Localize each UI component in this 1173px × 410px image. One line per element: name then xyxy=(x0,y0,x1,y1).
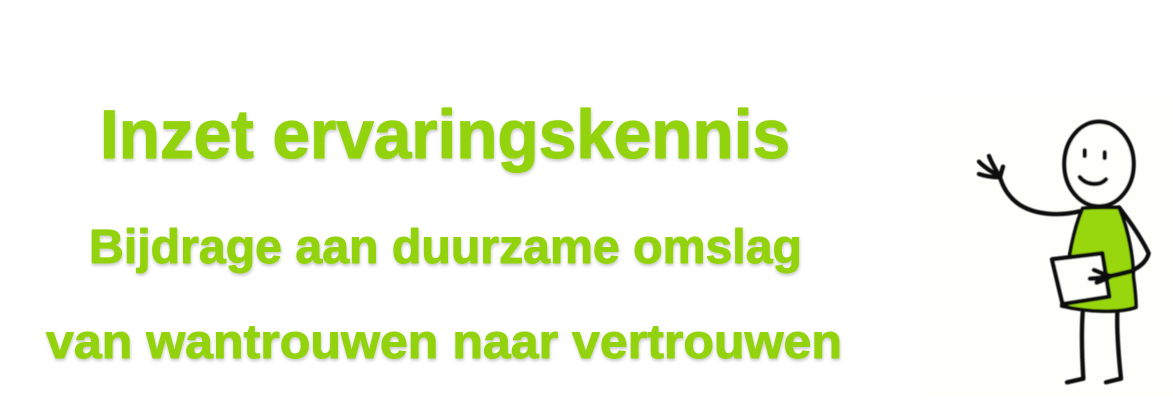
figure face: smile xyxy=(1080,177,1106,184)
figure body: green shirt xyxy=(1062,207,1136,311)
hand over notepad xyxy=(1090,270,1133,283)
notepad xyxy=(1052,253,1109,304)
figure legs and feet xyxy=(1067,313,1121,382)
figure raised arm and hand xyxy=(979,156,1079,214)
icon: waving stick figure holding a notepad xyxy=(979,122,1149,382)
title: Inzet ervaringskennis xyxy=(100,96,790,173)
subtitle line 1: Bijdrage aan duurzame omslag xyxy=(89,221,802,274)
figure other arm on hip xyxy=(1119,207,1149,270)
illustration panel background xyxy=(921,96,1173,396)
figure head xyxy=(1064,122,1134,206)
subtitle line 2: van wantrouwen naar vertrouwen xyxy=(46,316,842,369)
figure face: eyes xyxy=(1085,150,1105,158)
